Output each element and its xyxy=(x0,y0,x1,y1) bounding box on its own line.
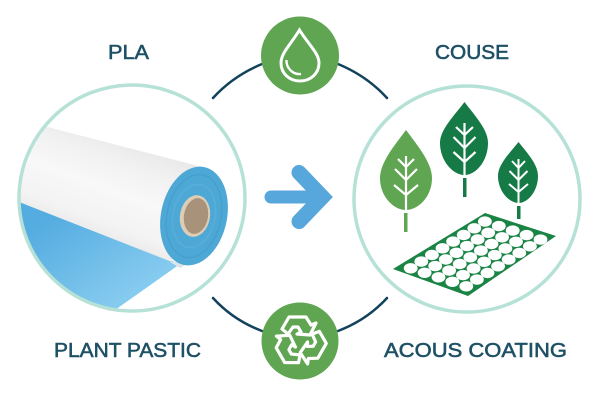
panel: plastic roll xyxy=(14,85,245,322)
blue sheet xyxy=(20,202,177,308)
ring xyxy=(19,85,245,311)
roll photo xyxy=(20,127,228,308)
ring xyxy=(354,86,580,312)
roll body xyxy=(14,125,202,262)
label: ACOUS COATING: ACOUS COATING xyxy=(384,340,567,362)
cycle arcs xyxy=(213,64,387,331)
roll shadow xyxy=(170,240,222,268)
roll end xyxy=(160,166,228,266)
tree: dark green middle xyxy=(440,102,488,197)
arrow xyxy=(271,172,322,222)
panel: coating xyxy=(354,86,580,312)
icon: recycle xyxy=(262,302,338,380)
label: PLANT PASTIC: PLANT PASTIC xyxy=(54,340,201,362)
tree: light green xyxy=(380,130,432,232)
tree: dark green right xyxy=(498,142,538,219)
cardboard core xyxy=(180,195,210,237)
icon: water drop xyxy=(261,16,339,94)
heading: PLA: PLA xyxy=(108,42,150,64)
honeycomb mesh xyxy=(393,213,556,296)
heading: COUSE: COUSE xyxy=(435,42,509,64)
